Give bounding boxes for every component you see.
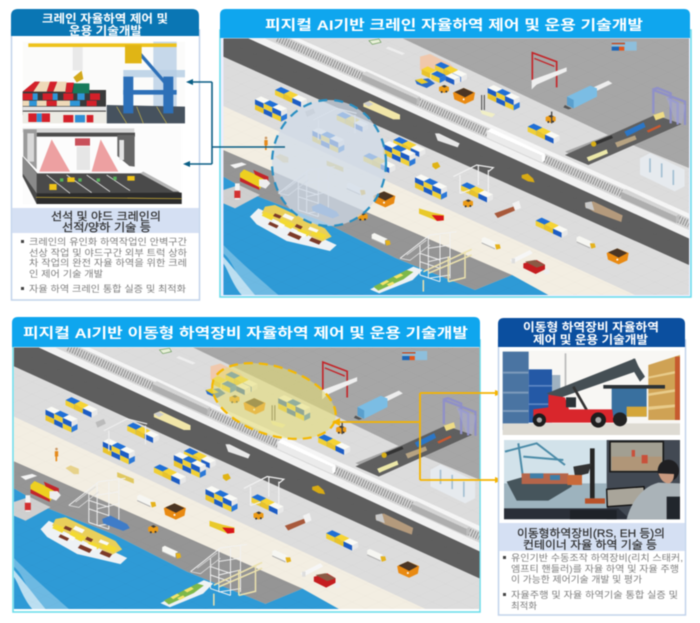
text block: crane bullets: 인 제어 기술 개발 xyxy=(29,269,103,279)
text block: mobile equipment bullets: 최적화 xyxy=(511,600,537,611)
heading: crane panel header xyxy=(11,9,199,38)
photo: remote control operator xyxy=(504,440,680,519)
heading: top scene header xyxy=(220,9,690,38)
heading: mobile panel header xyxy=(498,318,685,347)
subheading: mobile handling equipment xyxy=(499,523,685,552)
text block: crane bullets: 크레인의 유인화 하역작업인 안벽구간 xyxy=(29,237,187,247)
photo: container crane over ship xyxy=(23,42,185,123)
panel: crane autonomous stevedoring xyxy=(11,9,200,300)
panel: physical AI crane port scene xyxy=(220,9,691,297)
subheading: mobile handling equipment: 이동형하역장비(RS, EH 등)의 xyxy=(517,526,665,540)
illustration: port scene with mobile equipment highlight xyxy=(14,348,479,609)
heading: bottom scene header xyxy=(12,317,480,347)
subheading: berth and yard crane xyxy=(12,208,199,234)
text block: mobile equipment bullets: 자율주행 및 자율 하역기술 통합 실증 및 xyxy=(511,589,678,600)
subheading: berth and yard crane: 선적/양하 기술 등 xyxy=(62,220,151,234)
text block: crane bullets: 선상 작업 및 야드구간 외부 트럭 상하 xyxy=(29,247,188,258)
heading: crane panel header: 크레인 자율하역 제어 및 xyxy=(42,12,168,26)
heading: mobile panel header: 제어 및 운용 기술개발 xyxy=(533,332,648,346)
arrow: mobile zone to equipment photos xyxy=(332,390,503,483)
heading: bottom scene header: 피지컬 AI기반 이동형 하역장비 자율하역 제어 및 운용 기술개발 xyxy=(23,325,468,341)
text block: mobile equipment bullets: 엠프티 핸들러)를 자율 하역 및 자율 주행 xyxy=(511,563,679,574)
text block: crane bullets: 자율 하역 크레인 통합 실증 및 최적화 xyxy=(29,283,186,294)
highlight circle: crane zone xyxy=(272,100,386,226)
arrow: crane zone to crane photos xyxy=(183,79,285,167)
text block: mobile equipment bullets xyxy=(503,552,683,611)
panel: physical AI mobile equipment port scene xyxy=(12,317,480,612)
photo: yard crane with sensing cones xyxy=(23,126,182,204)
highlight ellipse: mobile equipment zone xyxy=(203,349,345,453)
heading: top scene header: 피지컬 AI기반 크레인 자율하역 제어 및 운용 기술개발 xyxy=(265,17,643,33)
illustration: port scene with crane highlight xyxy=(223,38,689,295)
text block: crane bullets: 차 작업의 완전 자율 하역을 위한 크레 xyxy=(29,257,187,268)
text block: mobile equipment bullets: 유인기반 수동조작 하역장비(리치 스태커, xyxy=(511,552,683,563)
subheading: berth and yard crane: 선석 및 야드 크레인의 xyxy=(51,210,161,223)
heading: mobile panel header: 이동형 하역장비 자율하역 xyxy=(523,320,659,334)
text block: crane bullets xyxy=(21,237,188,294)
text block: mobile equipment bullets: 이 가능한 제어기술 개발 및 평가 xyxy=(511,574,642,584)
photo: red reach stacker xyxy=(503,351,680,435)
heading: crane panel header: 운용 기술개발 xyxy=(69,24,142,38)
subheading: mobile handling equipment: 컨테이너 자율 하역 기술 등 xyxy=(523,538,657,552)
panel: mobile equipment autonomous stevedoring xyxy=(498,318,686,615)
